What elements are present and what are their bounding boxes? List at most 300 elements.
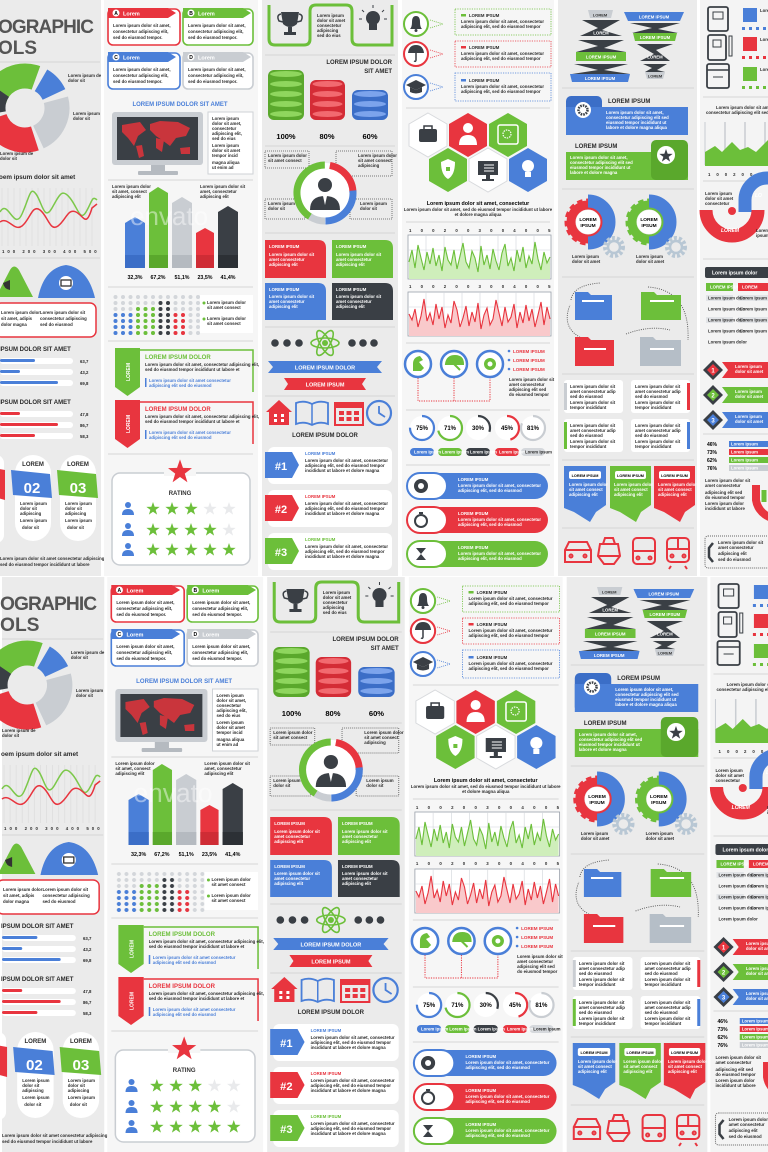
- box D: sed do eiusmod tempor.: [192, 656, 242, 661]
- column 4 panel: [402, 0, 687, 576]
- box C: C: [118, 632, 122, 638]
- zigzag ribbons: LOREM: [648, 74, 663, 78]
- red pill bar: adipiscing elit, sed do eiusmod: [458, 522, 522, 527]
- red text box: Lorem ipsum dolor sit: [42, 887, 89, 892]
- S-curve chart: dolor sit amet: [705, 196, 734, 201]
- red info block: LOREM IPSUM DOLOR: [149, 984, 216, 990]
- diamond numbered rows: dolor sit amet: [735, 394, 764, 399]
- trophy and bulb frame: Lorem ipsum: [323, 590, 350, 595]
- S-curve chart: LOREM: [721, 228, 740, 234]
- donut labels: dolor sit: [68, 78, 86, 83]
- red bar chart: IPSUM DOLOR SIT AMET: [1, 977, 74, 983]
- numbered pills: 03: [72, 1057, 89, 1074]
- numbered pills: LOREM: [22, 462, 44, 468]
- bar chart: amet, consectetur: [200, 189, 237, 194]
- percentage bars: Lorem ipsum: [731, 442, 758, 446]
- bar chart: [115, 761, 251, 858]
- dotted quote box: Lorem ipsum dolor sit: [718, 540, 764, 545]
- dotted quote box: sed do eiusmod: [729, 1134, 762, 1139]
- notebook icons with color keys: [717, 584, 768, 666]
- red arc with text: adipiscing elit sed: [715, 1067, 753, 1072]
- colored tabs: LOREM IPSUM: [274, 821, 305, 826]
- red info block: adipiscing elit sed do eiusmod: [149, 435, 212, 440]
- box B: sed do eiusmod tempor.: [188, 35, 237, 40]
- colored tabs: amet consectetur: [274, 876, 310, 881]
- column 2 panel: [104, 0, 259, 576]
- green pill bar: LOREM IPSUM: [465, 1122, 497, 1127]
- icon callouts: bell, umbrella, cap: LOREM IPSUM: [469, 78, 500, 83]
- colored tag banners: adipiscing elit: [623, 1069, 653, 1074]
- red arc with text: adipiscing elit sed: [705, 490, 743, 495]
- circle icons with dotted connector: LOREM IPSUM: [513, 358, 545, 363]
- gears: IPSUM: [580, 223, 596, 229]
- map text box: dolor sit amet,: [212, 121, 241, 126]
- title: OGRAPHIC: [0, 17, 94, 38]
- blue ribbon: [273, 938, 389, 950]
- zigzag ribbons: LOREM IPSUM: [650, 612, 681, 617]
- column 3 panel: [267, 577, 405, 1152]
- map text box: consectetur: [212, 126, 237, 131]
- numbered pills: LOREM: [24, 1039, 46, 1045]
- percentage bars: 46%: [717, 1019, 728, 1025]
- gears: [568, 201, 685, 264]
- dot matrix chart: Lorem ipsum dolor: [211, 893, 251, 898]
- line chart: [2, 765, 103, 831]
- red ribbon: [284, 378, 366, 390]
- percentage bars: Lorem ipsum: [731, 458, 758, 462]
- progress circles: Lorem ipsum: [414, 450, 441, 454]
- red text box: sit amet, adipis: [3, 893, 35, 898]
- text cards grid: amet consectetur adip: [579, 966, 625, 971]
- numbered pills: [0, 1032, 101, 1120]
- person ring chart: Lorem ipsum dolor: [364, 730, 404, 735]
- donut labels: dolor sit: [0, 156, 18, 161]
- numbered item 1: adipiscing elit, sed do eiusmod tempor: [311, 1040, 391, 1045]
- table: Lorem ipsum dolor: [718, 873, 758, 877]
- gears: LOREM: [588, 794, 606, 800]
- diamond numbered rows: 3: [722, 996, 726, 1001]
- numbered item 3: adipiscing elit, sed do eiusmod tempor: [305, 549, 385, 554]
- person ring chart: Lorem ipsum: [366, 778, 394, 783]
- colored tabs: LOREM IPSUM: [342, 864, 373, 869]
- colored tabs: Lorem ipsum dolor sit: [342, 829, 388, 834]
- title: OLS: [0, 615, 40, 636]
- bar chart: adipiscing elit: [115, 771, 145, 776]
- green info block: sed do eiusmod tempor incididunt ut labore et: [149, 944, 245, 949]
- zigzag ribbons: LOREM: [602, 608, 618, 612]
- numbered item 2: [265, 490, 392, 527]
- red ribbon: LOREM IPSUM: [311, 960, 351, 965]
- text cards grid: Lorem ipsum dolor sit: [635, 384, 681, 389]
- gears: Lorem ipsum: [572, 254, 599, 259]
- person ring chart: Lorem ipsum: [268, 201, 295, 206]
- map text box: dolor sit amet: [217, 725, 246, 730]
- table: Lorem ipsum: [740, 328, 767, 334]
- donut labels: dolor sit: [2, 733, 20, 738]
- box B: B: [189, 11, 193, 17]
- box D: Lorem ipsum dolor sit amet,: [192, 644, 250, 649]
- text cards grid: sed do eiusmod: [645, 971, 678, 976]
- hexagon caption: Lorem ipsum dolor sit amet, consectetur: [434, 778, 538, 784]
- person ring chart: adipiscing: [364, 740, 386, 745]
- stacks heading: [326, 60, 393, 75]
- text cards grid: Lorem ipsum dolor sit: [645, 977, 691, 982]
- icon callouts: bell, umbrella, cap: Lorem ipsum dolor sit amet, consectetur: [461, 51, 544, 56]
- red info block: LOREM: [126, 415, 132, 433]
- dotted quote box: [715, 1113, 768, 1145]
- blue ribbon: LOREM IPSUM DOLOR: [301, 943, 361, 948]
- blue gear card: labore et dolore magna aliqua: [606, 125, 667, 130]
- hexagon caption: et dolore magna aliqua: [455, 212, 502, 217]
- map text box: ut enim ad: [212, 165, 234, 170]
- rating panel: [112, 459, 250, 565]
- gears: IPSUM: [589, 800, 605, 806]
- table: Lorem ipsum dolor: [708, 318, 747, 322]
- gears: IPSUM: [651, 800, 666, 806]
- zigzag ribbons: LOREM IPSUM: [639, 14, 670, 20]
- donut labels: dolor sit: [76, 693, 94, 698]
- bottom text: [0, 556, 105, 567]
- bar chart: 41,4%: [220, 275, 236, 281]
- colored tabs: Lorem ipsum dolor sit: [274, 829, 320, 834]
- colored tag banners: sit amet consect: [614, 487, 648, 492]
- colored tabs: Lorem ipsum dolor sit: [269, 294, 315, 299]
- dot matrix chart: Lorem ipsum dolor: [211, 877, 251, 882]
- box C: consectetur adipiscing elit,: [116, 650, 172, 655]
- green noise chart: [408, 228, 687, 289]
- donut labels: Lorem ipsum de: [2, 728, 36, 733]
- stacked discs chart: [273, 647, 395, 718]
- map text box: [208, 112, 253, 174]
- green area chart: [715, 682, 768, 754]
- table: Lorem ipsum dolor: [708, 306, 747, 312]
- hexagon caption: Lorem ipsum dolor sit amet, sed do eiusmod tempor incididunt ut labore: [411, 784, 561, 789]
- map text box: magna aliqua: [217, 737, 245, 742]
- progress circles: Lorem ipsum: [478, 1027, 505, 1031]
- column 3 panel: [262, 0, 398, 576]
- bottom text: Lorem ipsum dolor sit amet consectetur adipiscing: [2, 1133, 108, 1138]
- progress circles: Lorem ipsum: [442, 450, 469, 454]
- person ring chart: Lorem ipsum dolor: [273, 730, 313, 735]
- box C: [111, 629, 184, 666]
- blue pill bar: LOREM IPSUM: [458, 477, 489, 482]
- diamond numbered rows: Lorem ipsum: [735, 364, 762, 369]
- box C: Lorem ipsum dolor sit amet,: [116, 644, 174, 649]
- circle icons with dotted connector: [412, 926, 563, 978]
- blue gear card: labore et dolore magna aliqua: [615, 702, 677, 707]
- progress circles: [417, 993, 561, 1033]
- column 2 panel: [107, 577, 264, 1152]
- numbered item 1: [270, 1024, 399, 1061]
- red arc with text: incididunt ut labore: [715, 1083, 756, 1088]
- colored tag banners: Lorem ipsum dolor: [578, 1059, 617, 1064]
- numbered pills: Lorem ipsum: [20, 518, 47, 523]
- vehicle icons: [574, 1115, 699, 1146]
- map text box: sed do eius: [212, 136, 236, 141]
- red arc with text: incididunt ut labore: [705, 506, 745, 511]
- map text box: Lorem ipsum: [217, 720, 244, 725]
- green star card: consectetur adipiscing elit sed: [579, 737, 643, 742]
- gears: dolor sit amet: [646, 836, 675, 841]
- colored tag banners: adipiscing elit: [668, 1069, 697, 1074]
- gears: LOREM: [579, 217, 597, 223]
- gears: IPSUM: [641, 223, 657, 229]
- numbered item 2: #2: [275, 504, 287, 516]
- numbered item 3: LOREM IPSUM: [311, 1114, 342, 1119]
- box C: sed do eiusmod tempor.: [113, 79, 162, 84]
- box C: sed do eiusmod tempor.: [116, 656, 166, 661]
- text cards grid: Lorem ipsum dolor sit: [645, 961, 691, 966]
- hexagon caption: et dolore magna aliqua: [462, 789, 510, 794]
- numbered item 1: incididunt ut labore et dolore magna: [311, 1045, 386, 1050]
- text cards grid: tempor incididunt: [570, 444, 607, 449]
- trophy and bulb frame: sed do eius: [317, 33, 341, 38]
- blue pill bar: LOREM IPSUM: [465, 1054, 497, 1059]
- colored tag banners: adipiscing elit: [614, 492, 643, 497]
- green star card: Lorem ipsum dolor sit amet,: [570, 155, 628, 160]
- colored tabs: adipiscing elit: [274, 839, 304, 844]
- map text box: consectetur: [217, 703, 241, 708]
- numbered item 1: Lorem ipsum dolor sit amet, consectetur: [305, 458, 388, 463]
- folders cycle: [576, 860, 698, 943]
- numbered item 3: [270, 1110, 399, 1147]
- red text box: [0, 303, 96, 337]
- colored tag banners: Lorem ipsum dolor: [668, 1059, 708, 1064]
- numbered item 2: [270, 1067, 399, 1104]
- box D: D: [193, 632, 197, 638]
- zigzag ribbons: LOREM IPSUM: [649, 592, 680, 596]
- percentage bars: 62%: [717, 1035, 728, 1041]
- text cards grid: tempor incididunt: [570, 405, 607, 410]
- title: [0, 17, 94, 59]
- green pill bar: Lorem ipsum dolor sit amet, consectetur: [465, 1128, 550, 1133]
- red arc with text: amet consectetur: [705, 483, 741, 488]
- text cards grid: sed do eiusmod: [570, 433, 603, 438]
- donut chart: [0, 64, 69, 152]
- box D: consectetur adipiscing elit,: [192, 650, 248, 655]
- colored tabs: [265, 240, 393, 320]
- bar chart: sit amet, consect: [115, 766, 151, 771]
- S-curve chart: LO: [755, 193, 762, 199]
- icon callouts: bell, umbrella, cap: LOREM IPSUM: [469, 45, 500, 50]
- numbered item 2: Lorem ipsum dolor sit amet, consectetur: [311, 1078, 395, 1083]
- text cards grid: Lorem ipsum dolor sit: [645, 1016, 691, 1021]
- text cards grid: tempor incididunt: [579, 1021, 616, 1026]
- box C: consectetur adipiscing elit,: [113, 73, 168, 78]
- red noise chart: [415, 869, 560, 913]
- progress circles: Lorem ipsum: [421, 1027, 448, 1031]
- progress circles: Lorem ipsum: [449, 1027, 477, 1031]
- percentage bars: 62%: [707, 458, 718, 464]
- red bar chart: 86,7: [80, 423, 89, 428]
- green info block: [118, 925, 264, 973]
- percentage bars: 73%: [707, 450, 718, 456]
- numbered item 3: Lorem ipsum dolor sit amet, consectetur: [311, 1121, 395, 1126]
- colored tabs: LOREM IPSUM: [269, 244, 300, 249]
- green noise chart: 100200300400500600700800: [416, 861, 697, 866]
- text cards grid: Lorem ipsum dolor sit: [579, 961, 625, 966]
- numbered item 1: adipiscing elit, sed do eiusmod tempor: [305, 463, 385, 468]
- box D: [183, 52, 253, 89]
- colored tag banners: LOREM IPSUM: [617, 474, 644, 478]
- red pill bar: [414, 1084, 557, 1110]
- numbered item 1: #1: [275, 461, 287, 473]
- trophy and bulb frame: dolor sit amet: [317, 18, 346, 23]
- colored tag banners: Lorem ipsum dolor: [614, 482, 653, 487]
- stacked discs chart: [268, 70, 388, 141]
- colored tag banners: LOREM IPSUM: [661, 474, 688, 478]
- blue pill bar: adipiscing elit, sed do eiusmod: [465, 1065, 530, 1070]
- trophy and bulb frame: sed do eius: [323, 610, 347, 615]
- text cards grid: sed do eiusmod: [570, 394, 603, 399]
- green star card: [566, 140, 688, 180]
- numbered pills: LOREM: [70, 1039, 92, 1045]
- circle icons with dotted connector: do eiusmod tempor: [509, 392, 549, 397]
- text cards grid: sed do eiusmod: [579, 1010, 612, 1015]
- dot matrix chart: sit amet consect: [211, 898, 246, 903]
- gears: Lorem ipsum: [636, 254, 663, 259]
- S-curve chart: consectetur: [715, 778, 740, 783]
- red info block: sed do eiusmod tempor incididunt ut labore et: [149, 996, 245, 1001]
- trophy and bulb frame: [269, 5, 392, 45]
- red info block: Lorem ipsum dolor sit amet consectetur: [153, 1007, 236, 1012]
- bar chart: 67,2%: [154, 852, 170, 858]
- bar chart: amet, consectetur: [204, 766, 242, 771]
- box D: Lorem ipsum dolor sit amet,: [188, 67, 246, 72]
- icon callouts: bell, umbrella, cap: Lorem ipsum dolor sit amet, consectetur: [469, 596, 553, 601]
- colored tag banners: LOREM IPSUM: [627, 1051, 654, 1055]
- zigzag ribbons: LOREM: [602, 590, 617, 594]
- green star card: eiusmod tempor incididunt ut: [570, 165, 631, 170]
- numbered pills: Lorem ipsum: [22, 1078, 50, 1083]
- green noise chart: [415, 805, 697, 866]
- dotted quote box: amet consectetur: [718, 545, 754, 550]
- blue bar chart: 69,8: [83, 958, 92, 963]
- table: Lorem ipsum dolor: [718, 906, 758, 910]
- column 6 panel: [700, 0, 768, 576]
- rating panel: RATING: [169, 491, 192, 497]
- blue gear card: consectetur adipiscing elit sed: [615, 692, 679, 697]
- blue ribbon: LOREM IPSUM DOLOR: [295, 366, 355, 372]
- red info block: adipiscing elit sed do eiusmod: [153, 1012, 216, 1017]
- bottom text: Lorem ipsum dolor sit amet consectetur adipiscing: [0, 556, 105, 561]
- map text box: Lorem ipsum: [212, 143, 239, 148]
- dot matrix chart: sit amet consect: [207, 321, 241, 326]
- monitor with world map: [115, 689, 207, 752]
- person ring chart: [265, 151, 397, 231]
- green noise chart: 100200300400500600700800: [409, 284, 687, 289]
- map text box: magna aliqua: [212, 160, 240, 165]
- text cards grid: [564, 380, 690, 452]
- box B: Lorem: [198, 12, 215, 18]
- percentage bars: [707, 441, 768, 472]
- green info block: adipiscing elit sed do eiusmod: [153, 960, 216, 965]
- box C: Lorem: [123, 56, 140, 62]
- colored tag banners: sit amet consect: [658, 487, 692, 492]
- text cards grid: amet consectetur adip: [570, 428, 616, 433]
- bar chart: Lorem ipsum dolor: [112, 184, 151, 189]
- map text box: [212, 689, 258, 751]
- stacks heading: LOREM IPSUM DOLOR: [326, 60, 393, 66]
- atom icon with dots: [271, 328, 378, 358]
- box B: Lorem ipsum dolor sit amet,: [192, 600, 250, 605]
- text cards grid: amet consectetur adip: [570, 389, 616, 394]
- gears: LOREM: [650, 794, 668, 800]
- numbered pills: adipiscing: [68, 1088, 90, 1093]
- green pill bar: LOREM IPSUM: [458, 545, 489, 550]
- text cards grid: Lorem ipsum dolor sit: [579, 1000, 625, 1005]
- colored tabs: Lorem ipsum dolor sit: [274, 871, 320, 876]
- text cards grid: Lorem ipsum dolor sit: [570, 384, 616, 389]
- dotted quote box: [705, 536, 768, 568]
- numbered pills: dolor sit: [65, 506, 83, 511]
- numbered item 3: LOREM IPSUM: [305, 537, 336, 542]
- box A: Lorem ipsum dolor sit amet,: [113, 23, 171, 28]
- circle icons with dotted connector: amet consectetur: [509, 382, 545, 387]
- blue bar chart: IPSUM DOLOR SIT AMET: [1, 924, 74, 930]
- box A: A: [118, 588, 122, 594]
- person ring chart: sit amet consect: [273, 735, 308, 740]
- red info block: [118, 977, 264, 1025]
- numbered pills: dolor sit: [67, 525, 85, 530]
- hexagon caption: Lorem ipsum dolor sit amet, consectetur: [427, 201, 529, 207]
- table: LOREM: [742, 284, 758, 290]
- red ribbon: LOREM IPSUM: [306, 382, 345, 388]
- dotted quote box: adipiscing elit: [718, 551, 747, 556]
- green noise chart: 100200300400500600700800: [409, 228, 687, 233]
- circle icons with dotted connector: Lorem ipsum dolor sit: [517, 954, 563, 959]
- blue pill bar: [407, 473, 548, 499]
- colored tabs: [270, 817, 400, 897]
- text cards grid: sed do eiusmod: [635, 394, 668, 399]
- diamond numbered rows: [703, 360, 768, 430]
- text cards grid: Lorem ipsum dolor sit: [635, 400, 681, 405]
- text cards grid: tempor incididunt: [645, 1021, 682, 1026]
- green pill bar: Lorem ipsum dolor sit amet, consectetur: [458, 551, 541, 556]
- trophy and bulb frame: adipiscing: [317, 28, 339, 33]
- red bar chart: 86,7: [83, 1000, 92, 1005]
- blue bar chart: 63,7: [80, 359, 89, 364]
- stacks heading: LOREM IPSUM DOLOR: [332, 637, 399, 643]
- progress circles: Lorem ipsum: [525, 450, 552, 454]
- blue gear card: eiusmod tempor incididunt ut: [606, 120, 667, 125]
- map text box: tempor incid: [212, 153, 238, 158]
- numbered pills: adipiscing: [65, 511, 87, 516]
- diamond numbered rows: Lorem ipsum: [735, 389, 762, 394]
- colored tabs: Lorem ipsum dolor sit: [336, 294, 382, 299]
- green star card: eiusmod tempor incididunt ut: [579, 742, 640, 747]
- box C: Lorem ipsum dolor sit amet,: [113, 67, 171, 72]
- table: Lorem ipsum dolor: [708, 340, 747, 344]
- diamond numbered rows: 2: [722, 971, 726, 976]
- zigzag ribbons: LOREM: [593, 12, 608, 18]
- bar chart: 51,1%: [174, 275, 190, 281]
- progress circles: 71%: [451, 1003, 464, 1009]
- icon shapes: shield and money: [0, 265, 95, 298]
- text cards grid: Lorem ipsum dolor sit: [570, 423, 616, 428]
- progress circles: 45%: [509, 1003, 522, 1009]
- colored tag banners: sit amet consect: [668, 1064, 702, 1069]
- numbered pills: Lorem ipsum: [65, 501, 92, 506]
- progress circles: 81%: [535, 1003, 548, 1009]
- column 4 panel: [409, 577, 697, 1152]
- diamond numbered rows: 1: [722, 946, 726, 951]
- progress circles: 75%: [423, 1003, 436, 1009]
- red arc with text: [705, 478, 768, 519]
- blue gear card: eiusmod tempor incididunt ut: [615, 697, 677, 702]
- person ring chart: sit amet consect: [358, 158, 392, 163]
- bar chart: Lorem ipsum dolor sit: [204, 761, 251, 766]
